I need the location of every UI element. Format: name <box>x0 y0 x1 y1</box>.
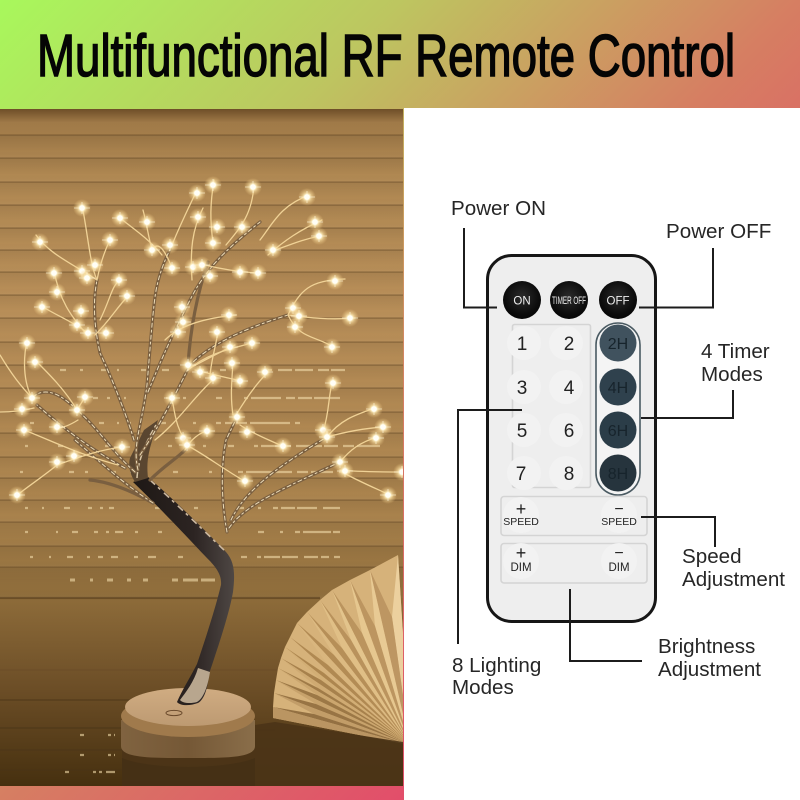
panel: tree lamp photo <box>0 109 411 786</box>
photo wall <box>0 109 403 786</box>
timer buttons <box>596 323 640 495</box>
dim buttons: + <box>516 543 526 563</box>
callout: Power OFF <box>639 220 771 308</box>
number buttons panel: 5 <box>517 421 527 442</box>
blind slat shading <box>0 135 403 598</box>
window blinds <box>0 135 403 770</box>
dim buttons: DIM <box>510 562 532 574</box>
speed buttons <box>501 496 647 536</box>
button: OFF: OFF <box>606 296 630 308</box>
timer buttons: 2H <box>608 336 628 353</box>
callout: 4 Timer Modes: 4 Timer <box>701 340 770 363</box>
callout: 4 Timer Modes: Modes <box>701 363 763 386</box>
number buttons panel <box>507 324 590 490</box>
speed buttons: SPEED <box>601 516 637 528</box>
speed buttons: + <box>516 499 526 519</box>
remote control <box>488 256 656 622</box>
callout: 4 Timer Modes <box>641 340 770 418</box>
button: OFF <box>599 281 637 319</box>
callout: 8 Lighting Modes: 8 Lighting <box>452 654 541 677</box>
panel: white remote panel <box>404 108 800 800</box>
table surface <box>254 722 403 750</box>
callout: Power OFF: Power OFF <box>666 220 771 243</box>
dim buttons <box>501 543 647 583</box>
button: TIMER OFF <box>550 281 588 319</box>
callout: Brightness Adjustment: Brightness <box>658 635 755 658</box>
callout: 8 Lighting Modes <box>452 410 541 699</box>
callout: Power ON <box>451 197 546 308</box>
button: TIMER OFF: TIMER OFF <box>552 295 586 307</box>
speed buttons: SPEED <box>503 516 539 528</box>
tree branches <box>32 222 340 532</box>
number buttons panel: 8 <box>564 464 574 485</box>
number buttons panel: 6 <box>564 421 574 442</box>
dim buttons: − <box>614 545 624 562</box>
lamp base <box>121 688 255 758</box>
timer buttons: 4H <box>608 380 628 397</box>
tree lights <box>8 176 411 504</box>
speed buttons: − <box>614 501 624 518</box>
timer buttons: 6H <box>608 423 628 440</box>
number buttons panel: 2 <box>564 334 574 355</box>
timer buttons: 8H <box>608 466 628 483</box>
button: ON <box>503 281 541 319</box>
callout: Speed Adjustment <box>641 517 785 591</box>
tree fine wires <box>0 180 403 496</box>
number buttons panel: 4 <box>564 378 575 399</box>
callout: Brightness Adjustment: Adjustment <box>658 658 761 681</box>
callout: Brightness Adjustment <box>570 589 761 681</box>
button: ON: ON <box>513 296 531 308</box>
callout: 8 Lighting Modes: Modes <box>452 676 514 699</box>
tree trunk <box>129 420 234 705</box>
number buttons panel: 7 <box>516 464 526 485</box>
remote body <box>488 256 656 622</box>
dim buttons: DIM <box>608 562 630 574</box>
origami book fan lamp <box>273 555 410 745</box>
number buttons panel: 1 <box>517 334 527 355</box>
number buttons panel: 3 <box>517 378 527 399</box>
light reflections on blinds <box>20 370 380 772</box>
callout: Power ON: Power ON <box>451 197 546 220</box>
callout: Speed Adjustment: Speed <box>682 545 742 568</box>
callout: Speed Adjustment: Adjustment <box>682 568 785 591</box>
